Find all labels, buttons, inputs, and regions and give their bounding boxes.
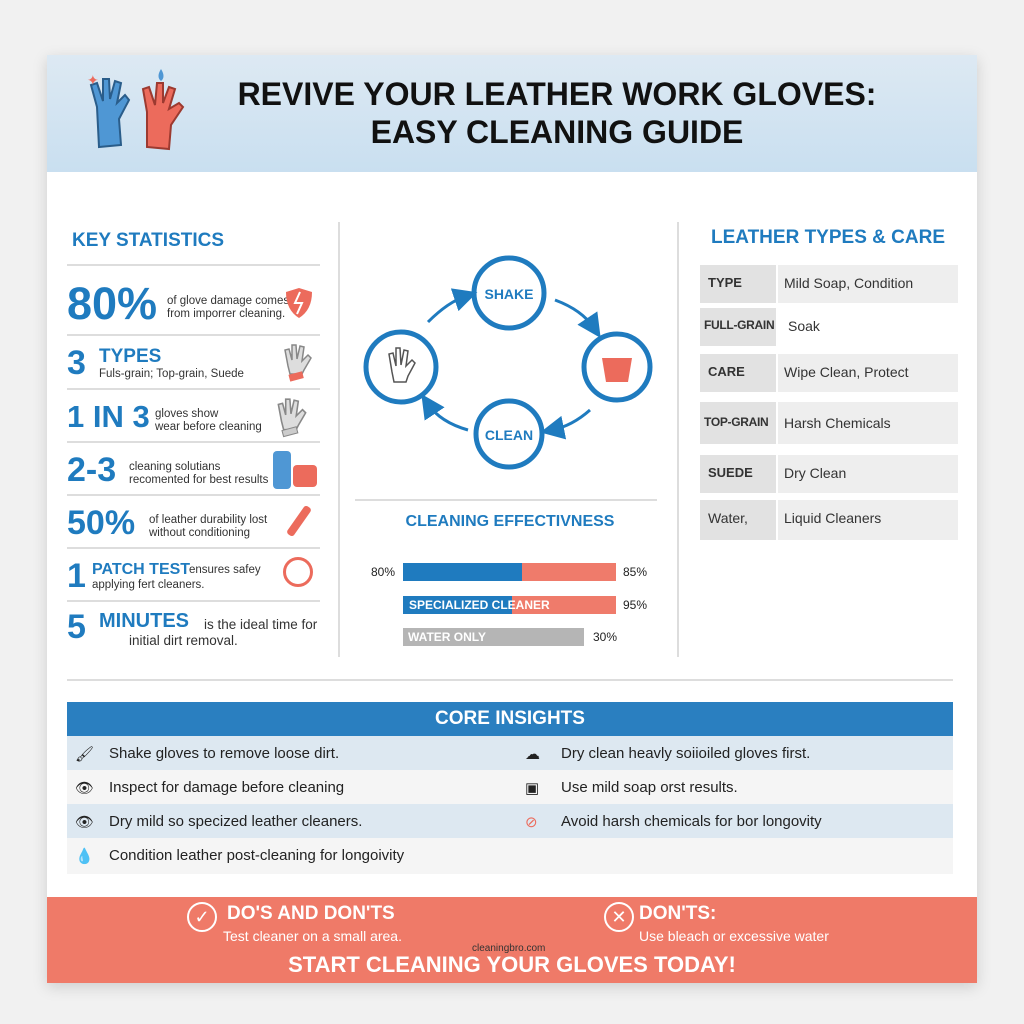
text: CARE [708,364,745,379]
text: ☁ [525,746,540,763]
text: ▣ [525,780,539,797]
chart: cleaning effectiveness: 80% [371,565,395,579]
text: from imporrer cleaning. [167,308,285,320]
chart: cleaning cycle: CLEAN [485,427,533,443]
text: MINUTES [99,610,189,632]
panel: leather types: LEATHER TYPES & CARE [711,227,945,248]
text: 1 IN 3 [67,399,150,434]
title: REVIVE YOUR LEATHER WORK GLOVES: [238,76,876,112]
text: Fuls-grain; Top-grain, Suede [99,368,244,380]
text: 👁 [75,814,94,831]
text: recomented for best results [129,474,268,486]
text: 👁 [75,780,94,797]
chart: cleaning cycle: SHAKE [484,286,534,302]
chart: cleaning effectiveness [371,513,647,646]
text: wear before cleaning [155,421,262,433]
text: is the ideal time for [204,617,317,632]
text: 5 [67,608,86,646]
text: of glove damage comes [167,295,289,307]
text: Use mild soap orst results. [561,779,738,796]
footer band: ✕ [611,907,627,927]
chart: cleaning effectiveness: CLEANING EFFECTIVNESS [406,513,614,530]
text: Soak [788,318,820,334]
text: 50% [67,504,135,542]
title [238,76,876,150]
chart: cleaning effectiveness: 30% [593,630,617,644]
text: Liquid Cleaners [784,510,881,526]
text: of leather durability lost [149,514,267,526]
text: Mild Soap, Condition [784,275,913,291]
text: FULL-GRAIN [704,318,774,332]
footer band: DO'S AND DON'TS [227,903,395,924]
text: Shake gloves to remove loose dirt. [109,745,339,762]
text: gloves show [155,408,218,420]
text: PATCH TEST [92,561,190,578]
chart: cleaning effectiveness: 85% [623,565,647,579]
footer band [47,897,977,983]
text: Dry clean heavly soiioiled gloves first. [561,745,810,762]
text: 2-3 [67,451,116,489]
text: Inspect for damage before cleaning [109,779,344,796]
icon: gloves [87,69,184,150]
text: ensures safey [189,564,261,576]
footer band: START CLEANING YOUR GLOVES TODAY! [288,952,736,977]
footer band: cleaningbro.com [472,943,545,954]
footer band: DON'TS: [639,903,716,924]
footer band: Use bleach or excessive water [639,928,829,944]
text: TYPES [99,346,161,367]
chart: cleaning cycle [364,256,652,470]
text: cleaning solutians [129,461,220,473]
text: Water, [708,510,748,526]
column dividers [338,222,340,657]
chart: cleaning effectiveness: WATER ONLY [408,630,486,644]
panel: core insights: CORE INSIGHTS [435,708,585,729]
footer band: ✓ [194,907,210,927]
text: TOP-GRAIN [704,415,768,429]
text: 💧 [75,848,94,865]
text: Avoid harsh chemicals for bor longovity [561,813,822,830]
heading: KEY STATISTICS [72,230,224,251]
text: TYPE [708,275,742,290]
chart: cleaning effectiveness: 95% [623,598,647,612]
text: initial dirt removal. [129,633,238,648]
text: SUEDE [708,465,753,480]
footer band: Test cleaner on a small area. [223,928,402,944]
title: EASY CLEANING GUIDE [371,114,743,150]
text: Condition leather post-cleaning for longoivity [109,847,404,864]
icon: gloves: ✦ [87,72,99,88]
chart: cleaning effectiveness: SPECIALIZED CLEANER [409,598,550,612]
text: Dry Clean [784,465,846,481]
text: Wipe Clean, Protect [784,364,908,380]
text: 80% [67,278,157,329]
text: 3 [67,344,86,382]
text: ⊘ [525,814,538,831]
text: applying fert cleaners. [92,579,205,591]
header [47,55,977,172]
text: Dry mild so specized leather cleaners. [109,813,362,830]
text: Harsh Chemicals [784,415,891,431]
text: 🖌 [75,746,94,763]
text: 1 [67,557,86,595]
text: without conditioning [149,527,250,539]
